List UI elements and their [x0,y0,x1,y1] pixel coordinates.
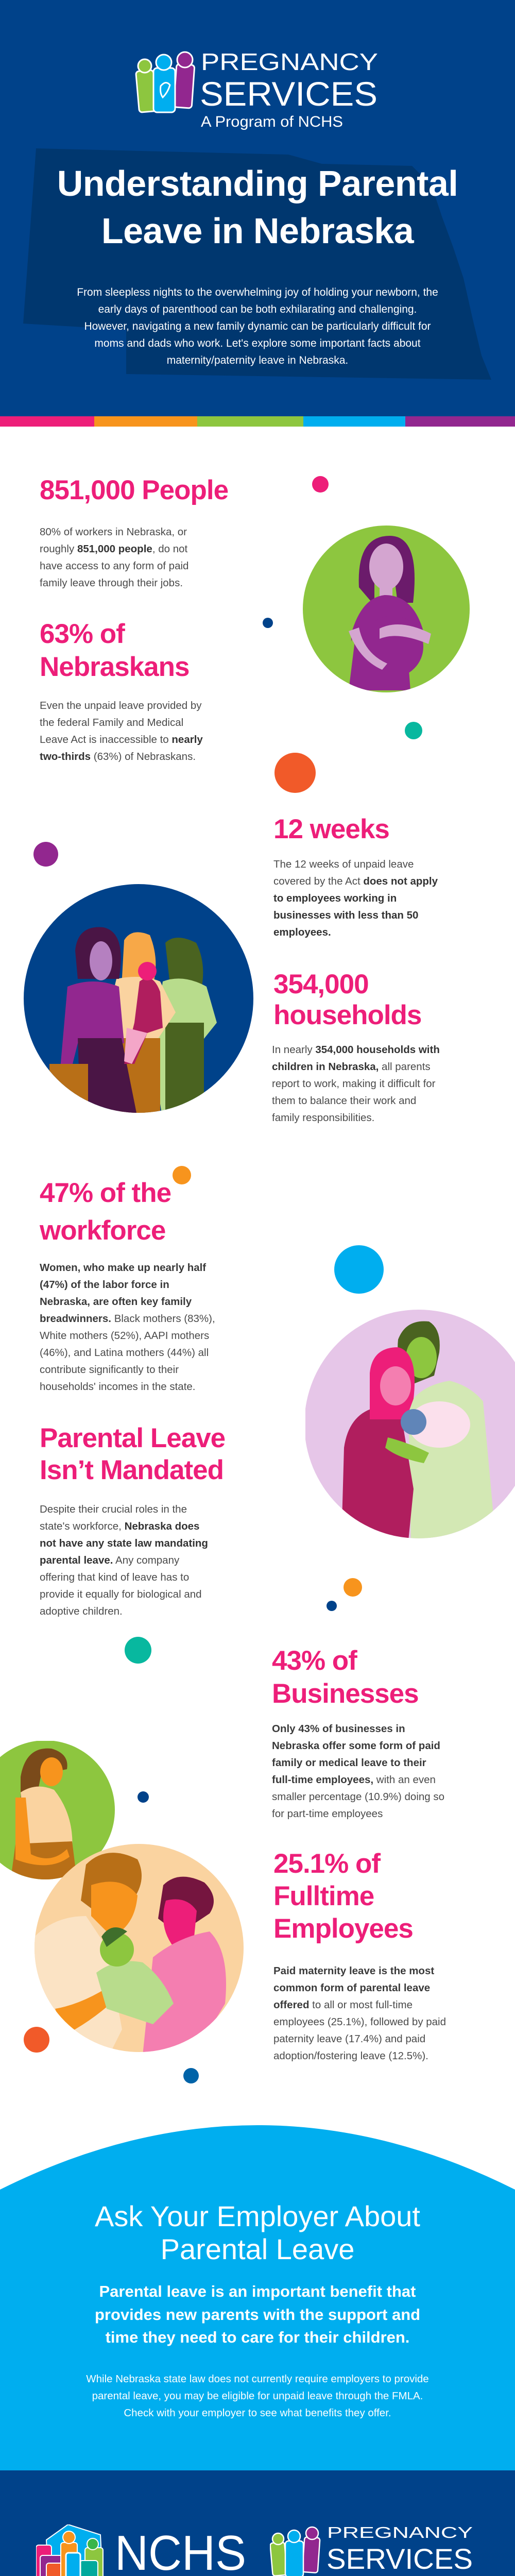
text: employees (25.1%), followed by paid [273,2016,446,2028]
text: covered by the Act does not apply [273,875,438,887]
text: employees. [273,926,331,938]
intro text [77,286,438,366]
text: Nebraska, are often key family [40,1296,192,1308]
body [86,2373,429,2419]
text: paternity leave (17.4%) and paid [273,2033,425,2045]
text: Paid maternity leave is the most [273,1965,434,1977]
section: 851,000 people: 851,000 People [40,475,228,505]
text: for part-time employees [272,1808,383,1820]
logo: pregnancy services: PREGNANCY [201,48,378,75]
text: Nebraska offer some form of paid [272,1740,440,1752]
title: Understanding Parental [57,163,458,204]
section: 354,000 households: 354,000 [273,969,369,999]
text: family responsibilities. [272,1112,374,1124]
title: Leave in Nebraska [101,211,414,251]
section: parental leave isn't mandated: Parental Leave [40,1423,225,1453]
header panel [0,0,515,416]
illustration: pregnant woman [303,526,470,692]
text: Leave Act is inaccessible to nearly [40,734,203,745]
logo: pregnancy services [135,48,378,130]
text: roughly 851,000 people, do not [40,543,187,555]
section: 43% of businesses: 43% of [272,1646,357,1676]
section: 63% of nebraskans: 63% of [40,619,125,649]
text: smaller percentage (10.9%) doing so [272,1791,444,1803]
heading: Ask Your Employer About [95,2200,420,2232]
nebraska map shape [23,148,491,380]
section: parental leave isn't mandated [40,1423,225,1485]
intro text: However, navigating a new family dynamic can be particularly difficult for [84,320,431,332]
section: 47% of the workforce: 47% of the [40,1178,171,1208]
panel: ask your employer [0,2125,515,2470]
text: White mothers (52%), AAPI mothers [40,1330,209,1342]
text: Only 43% of businesses in [272,1723,405,1735]
subheading: time they need to care for their children. [106,2328,409,2346]
illustration: couple with baby [305,1310,515,1538]
text: Despite their crucial roles in the [40,1503,187,1515]
section: 47% of the workforce: workforce [40,1215,165,1246]
text: full-time employees, with an even [272,1774,436,1786]
text: offering that kind of leave has to [40,1571,189,1583]
heading [95,2200,420,2265]
title [57,163,458,251]
text: state's workforce, Nebraska does [40,1520,199,1532]
text: Women, who make up nearly half [40,1262,206,1274]
section: 43% of businesses: Businesses [272,1679,419,1709]
intro text: From sleepless nights to the overwhelming joy of holding your newborn, the [77,286,438,298]
text: them to balance their work and [272,1095,416,1107]
text: the federal Family and Medical [40,717,183,728]
section: 43% of businesses [272,1646,419,1709]
logo: pregnancy services: SERVICES [327,2543,473,2575]
text: children in Nebraska, all parents [272,1061,431,1073]
text: breadwinners. Black mothers (83%), [40,1313,215,1325]
text: 80% of workers in Nebraska, or [40,526,187,538]
section: 63% of nebraskans: Nebraskans [40,652,190,682]
section: 25.1% of fulltime employees: Fulltime [273,1881,374,1911]
illustration: pregnant woman small [0,1741,115,1879]
text: family leave through their jobs. [40,577,183,589]
text: not have any state law mandating [40,1537,208,1549]
section: 25.1% of fulltime employees: Employees [273,1913,413,1944]
section: parental leave isn't mandated: Isn’t Mandated [40,1455,224,1485]
text: have access to any form of paid [40,560,188,572]
subheading: provides new parents with the support and [95,2305,420,2324]
illustration: parents with baby [35,1844,244,2052]
text: households' incomes in the state. [40,1381,196,1393]
section: 12 weeks: 12 weeks [273,814,389,844]
text: family or medical leave to their [272,1757,426,1769]
section: 25.1% of fulltime employees [273,1849,413,1944]
text: (46%), and Latina mothers (44%) all [40,1347,209,1359]
text: offered to all or most full-time [273,1999,413,2011]
text: provide it equally for biological and [40,1588,202,1600]
text: contribute significantly to their [40,1364,179,1376]
logo: pregnancy services: SERVICES [200,75,377,113]
intro text: early days of parenthood can be both exhilarating and challenging. [98,303,417,315]
section: 354,000 households: households [273,1000,421,1030]
heading: Parental Leave [161,2233,354,2265]
text: parental leave. Any company [40,1554,179,1566]
illustration: three women [24,884,253,1113]
subheading: Parental leave is an important benefit that [99,2282,416,2300]
panel: footer navy [0,2470,515,2576]
text: (47%) of the labor force in [40,1279,169,1291]
body: Check with your employer to see what benefits they offer. [124,2407,391,2419]
text: businesses with less than 50 [273,909,418,921]
section: 47% of the workforce [39,1178,171,1246]
text: adoption/fostering leave (12.5%). [273,2050,428,2062]
intro text: maternity/paternity leave in Nebraska. [167,354,348,366]
text: adoptive children. [40,1605,123,1617]
body: parental leave, you may be eligible for unpaid leave through the FMLA. [92,2390,423,2402]
text: two-thirds (63%) of Nebraskans. [40,751,196,762]
text: to employees working in [273,892,397,904]
text: The 12 weeks of unpaid leave [273,858,414,870]
text: common form of parental leave [273,1982,430,1994]
text: Even the unpaid leave provided by [40,700,202,711]
intro text: moms and dads who work. Let's explore some important facts about [94,337,421,349]
section: 63% of nebraskans [40,619,190,682]
text: In nearly 354,000 households with [272,1044,440,1056]
color bar [0,416,515,427]
text: report to work, making it difficult for [272,1078,436,1090]
section: 25.1% of fulltime employees: 25.1% of [273,1849,380,1879]
logo: NCHS children first [36,2524,246,2576]
section: 354,000 households [273,969,421,1030]
subheading [95,2282,420,2346]
body: While Nebraska state law does not currently require employers to provide [86,2373,429,2385]
logo: pregnancy services [270,2524,473,2576]
